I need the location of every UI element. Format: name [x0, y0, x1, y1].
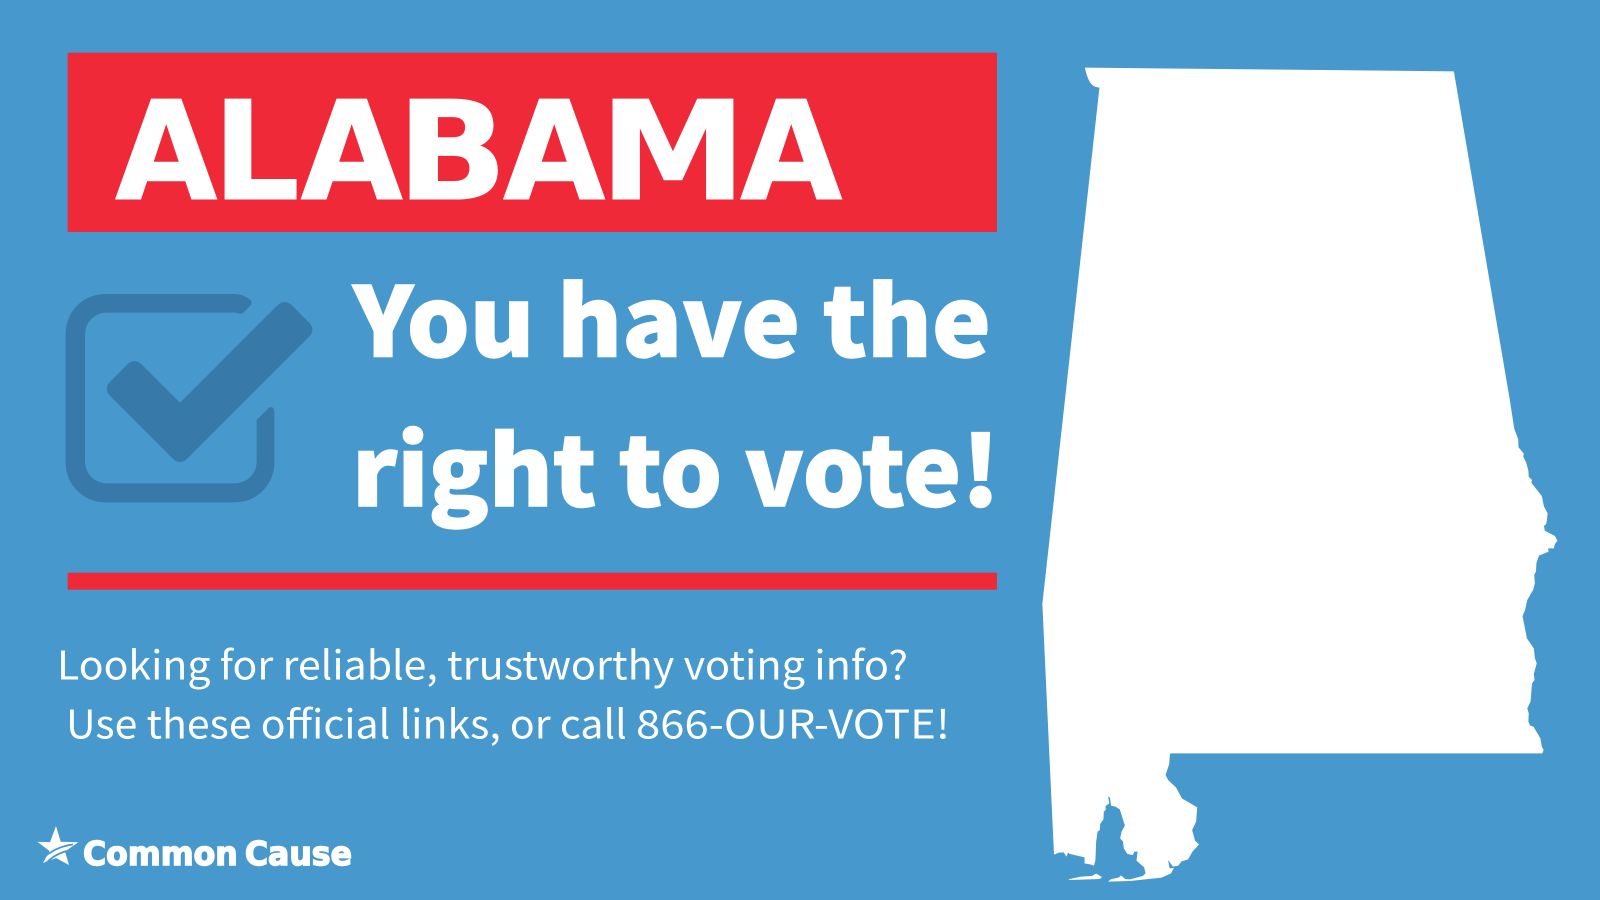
- info line 1: trustworthy voting info?: [447, 634, 908, 691]
- icon: Common Cause star: [37, 826, 78, 865]
- icon: Alabama state silhouette: [1042, 68, 1557, 882]
- title: ALABAMA: A: [740, 73, 842, 232]
- title: ALABAMA: L: [212, 73, 300, 232]
- logo: Common Cause: [37, 826, 352, 873]
- info text: [57, 634, 950, 750]
- title: ALABAMA: B: [397, 73, 508, 232]
- title: ALABAMA: M: [600, 73, 746, 232]
- title: ALABAMA: A: [115, 73, 217, 232]
- info line 1: Looking for reliable,: [57, 634, 447, 691]
- title: ALABAMA: A: [300, 73, 403, 232]
- headline: [352, 246, 1000, 534]
- headline line 2: right to vote!: [352, 395, 1000, 534]
- wordmark: Common Cause: [83, 834, 352, 873]
- info line 2: 866-OUR-VOTE!: [636, 693, 950, 750]
- headline line 1: You have the: [352, 246, 991, 385]
- title banner: [68, 53, 997, 232]
- icon: ballot checkbox with check mark: [66, 294, 303, 502]
- red divider bar: [68, 573, 997, 590]
- info line 2: Use these official links, or call: [66, 693, 636, 750]
- title: ALABAMA: A: [503, 73, 605, 232]
